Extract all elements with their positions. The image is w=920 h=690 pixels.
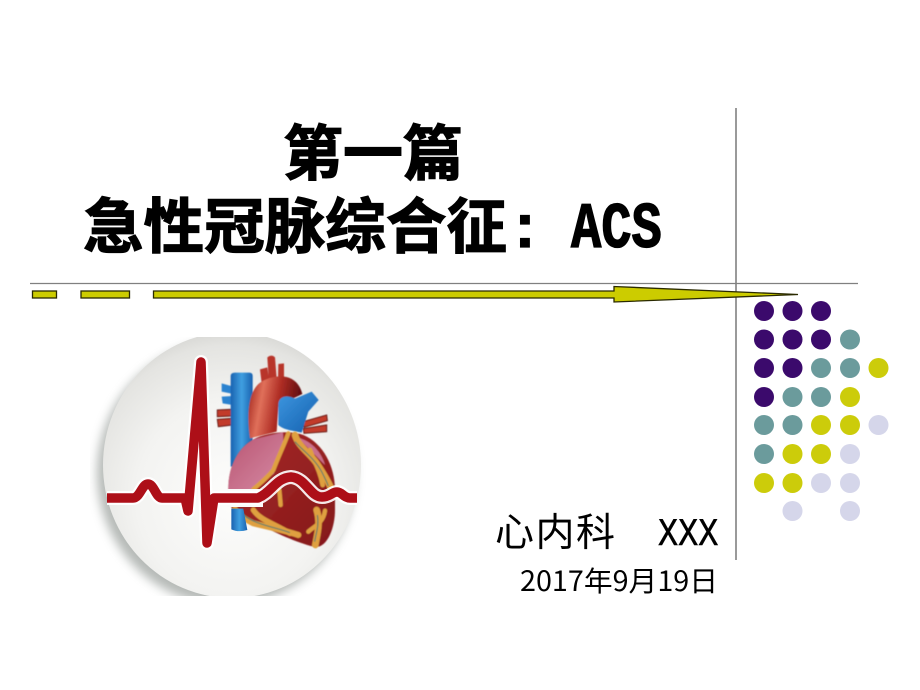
dot grid (754, 301, 888, 521)
department name: 心内科 (495, 502, 615, 558)
author placeholder: XXX (658, 513, 719, 557)
purple dots (754, 301, 831, 407)
date: 2017年9月19日 (520, 560, 718, 600)
heart vessels (217, 356, 327, 467)
yellow dots (754, 358, 888, 493)
title (83, 106, 662, 267)
pulmonary artery (278, 392, 319, 433)
anatomical heart (217, 356, 335, 547)
ball shadow (97, 341, 355, 605)
light right wall (297, 437, 325, 465)
teal dots (754, 330, 860, 464)
aortic arch (248, 376, 302, 438)
title line 2: ACS (571, 195, 662, 267)
ECG halo (107, 362, 357, 543)
coronary vessels (235, 433, 331, 545)
ECG line (107, 362, 357, 543)
dash 2 (81, 291, 130, 298)
icon: heart and ECG ball (97, 332, 361, 605)
title line 2: : (515, 192, 535, 261)
title line 1: 第一篇 (283, 106, 463, 193)
lavender dots (782, 415, 888, 521)
heart body (228, 432, 335, 547)
left blue branches (222, 383, 233, 405)
dash 1 (32, 291, 56, 298)
arrow with long shaft (154, 286, 798, 302)
left red branches (217, 409, 232, 427)
coronary details (243, 442, 328, 542)
white ball (103, 332, 361, 598)
right red branches (303, 415, 327, 433)
vertical rule (735, 108, 737, 560)
dashed arrow (32, 286, 798, 302)
pink atrium (228, 432, 283, 490)
horizontal rule (30, 282, 858, 284)
ECG white gap on heart (227, 489, 263, 507)
slide (30, 108, 888, 596)
superior vena cava (231, 373, 253, 467)
department label (495, 502, 719, 558)
myocardium (228, 432, 335, 547)
inferior vena cava (231, 509, 247, 531)
title line 2: 急性冠脉综合征 (83, 179, 507, 266)
aorta branches (260, 356, 284, 383)
